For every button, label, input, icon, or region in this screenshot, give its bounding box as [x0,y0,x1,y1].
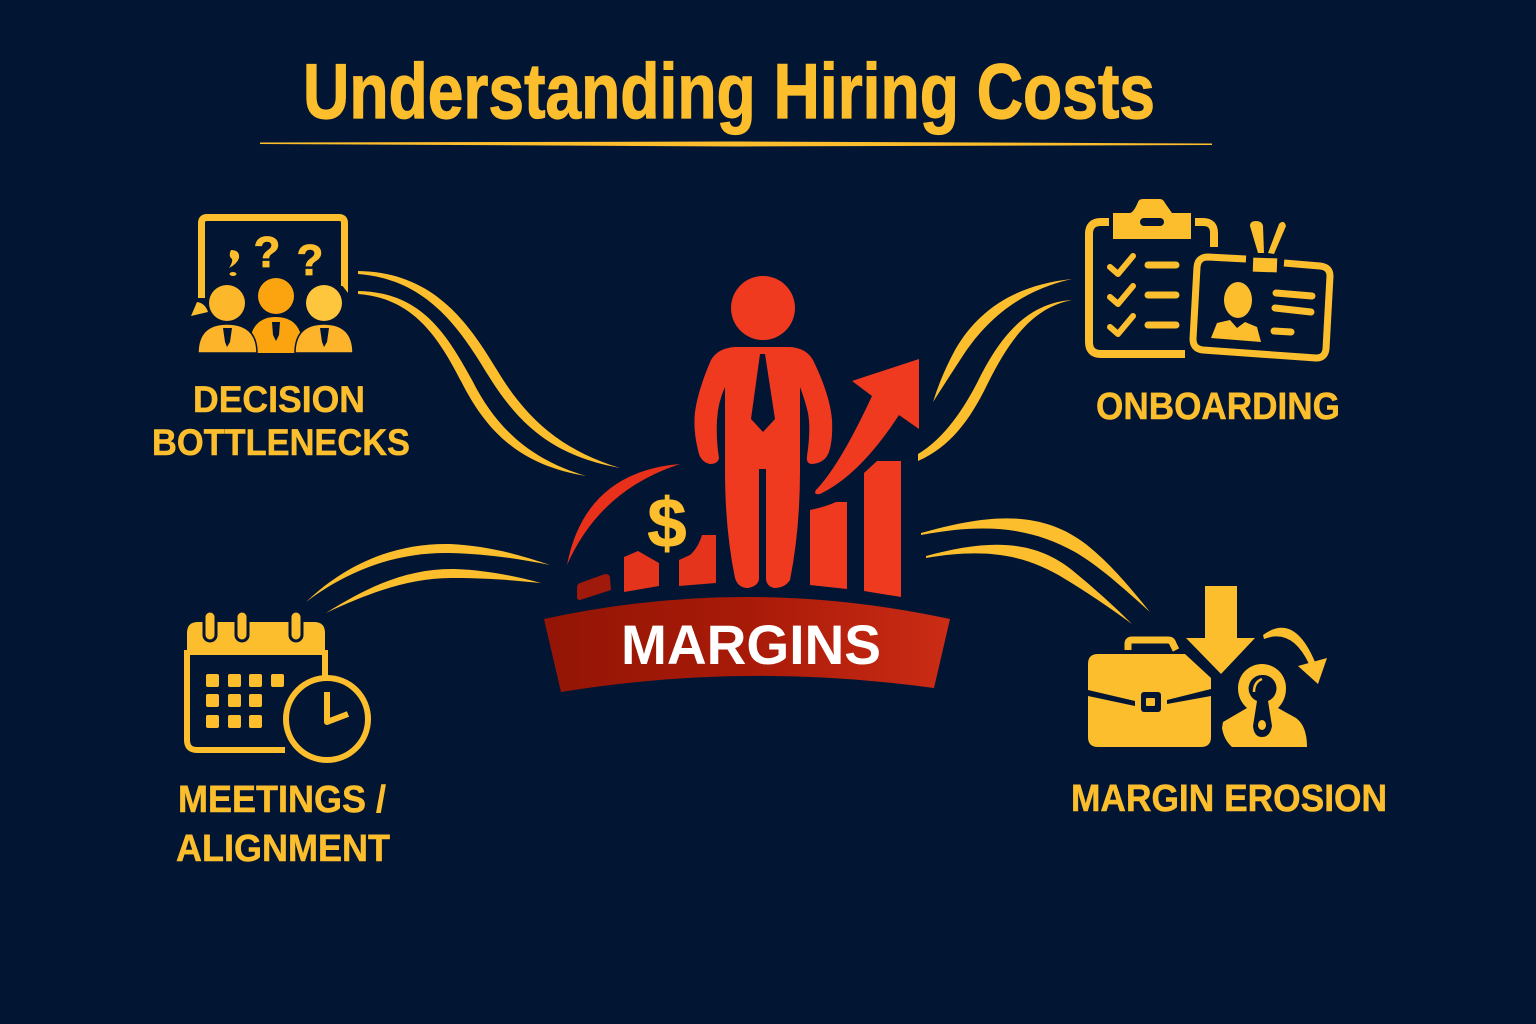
title underline [260,142,1212,146]
label: meetings / alignment: MEETINGS / [178,779,386,821]
icon: onboarding [1089,199,1330,358]
label: decision bottlenecks: BOTTLENECKS [152,422,410,463]
growth arrow [815,359,919,494]
arrow: margins to margin erosion [921,518,1150,624]
bars [577,574,611,600]
central figure: margins: MARGINS [621,613,881,676]
label: onboarding: ONBOARDING [1096,386,1340,428]
title: Understanding Hiring Costs [303,47,1155,135]
arrow: decision bottlenecks to margins [358,271,620,476]
icon: decision bottlenecks: ? [254,228,280,277]
label: meetings / alignment [176,779,390,870]
label: decision bottlenecks [152,379,410,463]
arrow: meetings to margins [306,544,550,613]
central figure: margins [544,276,950,692]
icon: margin erosion [1088,586,1327,747]
icon: decision bottlenecks: ? [297,236,323,285]
label: meetings / alignment: ALIGNMENT [176,828,390,870]
tie [751,354,775,432]
person [694,276,832,588]
swoosh [567,464,680,565]
dollar: $ [648,484,686,562]
label: margin erosion: MARGIN EROSION [1071,778,1387,820]
label: decision bottlenecks: DECISION [193,379,365,420]
arrow: onboarding to margins [918,279,1072,461]
icon: meetings calendar and clock [187,611,368,760]
icon: decision bottlenecks [191,218,353,353]
